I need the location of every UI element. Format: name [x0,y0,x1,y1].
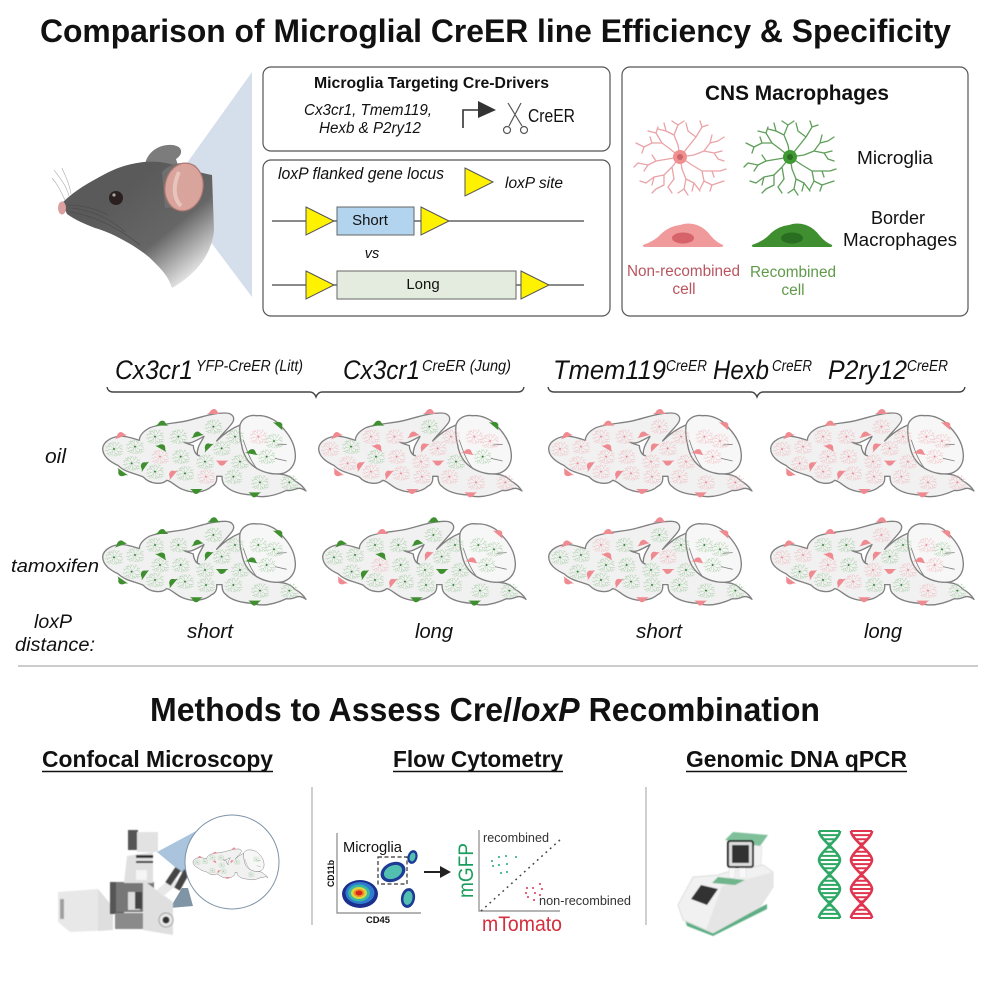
long locus: Long [406,276,440,293]
P2ry12 label: CreER [907,358,948,375]
x axis label: CD45 [366,915,391,926]
brace [548,387,965,397]
recombined label: cell [781,282,805,299]
short locus [272,207,584,235]
Tmem119 label: Tmem119 [553,355,666,385]
loxP legend [465,168,563,196]
icon: promoter arrow [463,101,496,128]
group header: Cx3cr1 lines [107,355,524,397]
magnified view [185,815,279,909]
brain: Jung oil [319,409,522,497]
population blob: negative [342,880,378,908]
brain: Tmem119 tamoxifen [549,517,752,606]
non-recombined dots [525,883,543,901]
row label: loxP distance: distance: [15,635,95,656]
lid [725,832,768,846]
mouse head [52,145,214,288]
panel: CNS macrophages [622,67,968,316]
mGFP axis label: mGFP [455,843,478,898]
row label: tamoxifen: tamoxifen [11,555,99,576]
non-recombined label: Non-recombined [627,263,740,280]
row label: oil: oil [45,446,67,468]
recombined label: recombined [483,831,549,845]
method heading: qPCR: Genomic DNA qPCR [686,746,907,772]
icon: recombined microglia [744,121,836,195]
non-recombined label: cell [672,281,696,298]
Litt line label: Cx3cr1 [115,355,193,385]
Tmem119 label: CreER [666,358,707,375]
body [678,865,773,933]
brain: Litt tamoxifen [103,517,306,606]
Litt line label [115,355,303,385]
section heading: Methods to Assess Cre/loxP Recombination [150,691,820,728]
brace [107,387,524,397]
gate [378,857,407,884]
base strip [685,904,767,936]
loxP legend: loxP site [505,175,563,192]
Hexb label [713,355,812,385]
DNA: non-recombined red [851,831,872,918]
panel: cre drivers [263,67,610,151]
short locus: Short [352,212,389,229]
Jung line label: CreER (Jung) [422,358,511,375]
brain: Tmem119 oil [549,409,752,497]
recombined label [750,264,836,299]
screen [691,885,718,905]
column labels: loxP distance [187,621,902,643]
brain: Jung tamoxifen [323,517,526,606]
zoom cone [187,72,252,297]
tablet [170,888,193,908]
locus heading: loxP flanked gene locus [278,165,444,183]
arrow [424,866,451,878]
title: Comparison of Microglial CreER line Efficiency & Specificity [40,13,951,49]
Jung line label [343,355,511,385]
non-recombined label [627,263,740,298]
microglia label: Microglia [857,147,934,168]
long locus [272,271,584,299]
icon: recombined border macrophage [752,224,832,247]
population blob: microglia [377,858,409,886]
mouse head with zoom cone [52,72,252,297]
row label: loxP distance: loxP [34,612,72,633]
flow cytometry gating plot [326,833,421,926]
column labels: loxP distance: short [187,621,234,643]
P2ry12 label: P2ry12 [828,355,907,385]
PCR machine [678,832,773,936]
microglia label: Microglia [343,839,403,856]
column labels: loxP distance: short [636,621,683,643]
DNA: recombined green [819,831,840,918]
panel heading: Microglia Targeting Cre-Drivers [314,75,549,92]
recombined dots [491,855,517,874]
Hexb label: CreER [772,358,812,375]
method heading: confocal: Confocal Microscopy [42,746,273,772]
light cone [157,830,198,877]
brain: P2ry12 oil [771,409,974,497]
recombined label: Recombined [750,264,836,281]
detector box [58,889,113,932]
icon: scissors [504,103,528,134]
fluorescence scatter plot [455,830,631,936]
column labels: loxP distance: long [415,621,453,643]
brain: Litt oil [103,409,306,497]
gene names: Cx3cr1, Tmem119, [304,102,432,119]
column labels: loxP distance: long [864,621,902,643]
panel: loxP gene locus [263,160,610,316]
icon: non-recombined border macrophage [643,224,723,247]
row label: loxP distance [15,612,95,656]
panel heading: CNS Macrophages [705,82,889,105]
population blob: upper [406,849,419,865]
border macrophages label: Macrophages [843,229,957,250]
method heading: flow: Flow Cytometry [393,746,563,772]
microscope illustration [58,815,279,935]
border macrophages label [843,207,957,250]
mTomato axis label: mTomato [482,913,562,936]
border macrophages label: Border [871,207,925,228]
brain: P2ry12 tamoxifen [771,517,974,606]
microscope body [110,830,187,935]
Litt line label: YFP-CreER (Litt) [196,358,303,375]
icon: non-recombined microglia [634,121,726,195]
y axis label: CD11b [326,860,337,887]
CreER label: CreER [528,106,575,126]
non-recombined label: non-recombined [539,894,631,908]
gene names: Hexb & P2ry12 [319,120,421,137]
Jung line label: Cx3cr1 [343,355,420,385]
Hexb label: Hexb [713,355,769,385]
vs label: vs [365,246,379,262]
group header: other lines [548,355,965,397]
gene names [304,102,432,137]
population blob: lower [399,887,417,909]
